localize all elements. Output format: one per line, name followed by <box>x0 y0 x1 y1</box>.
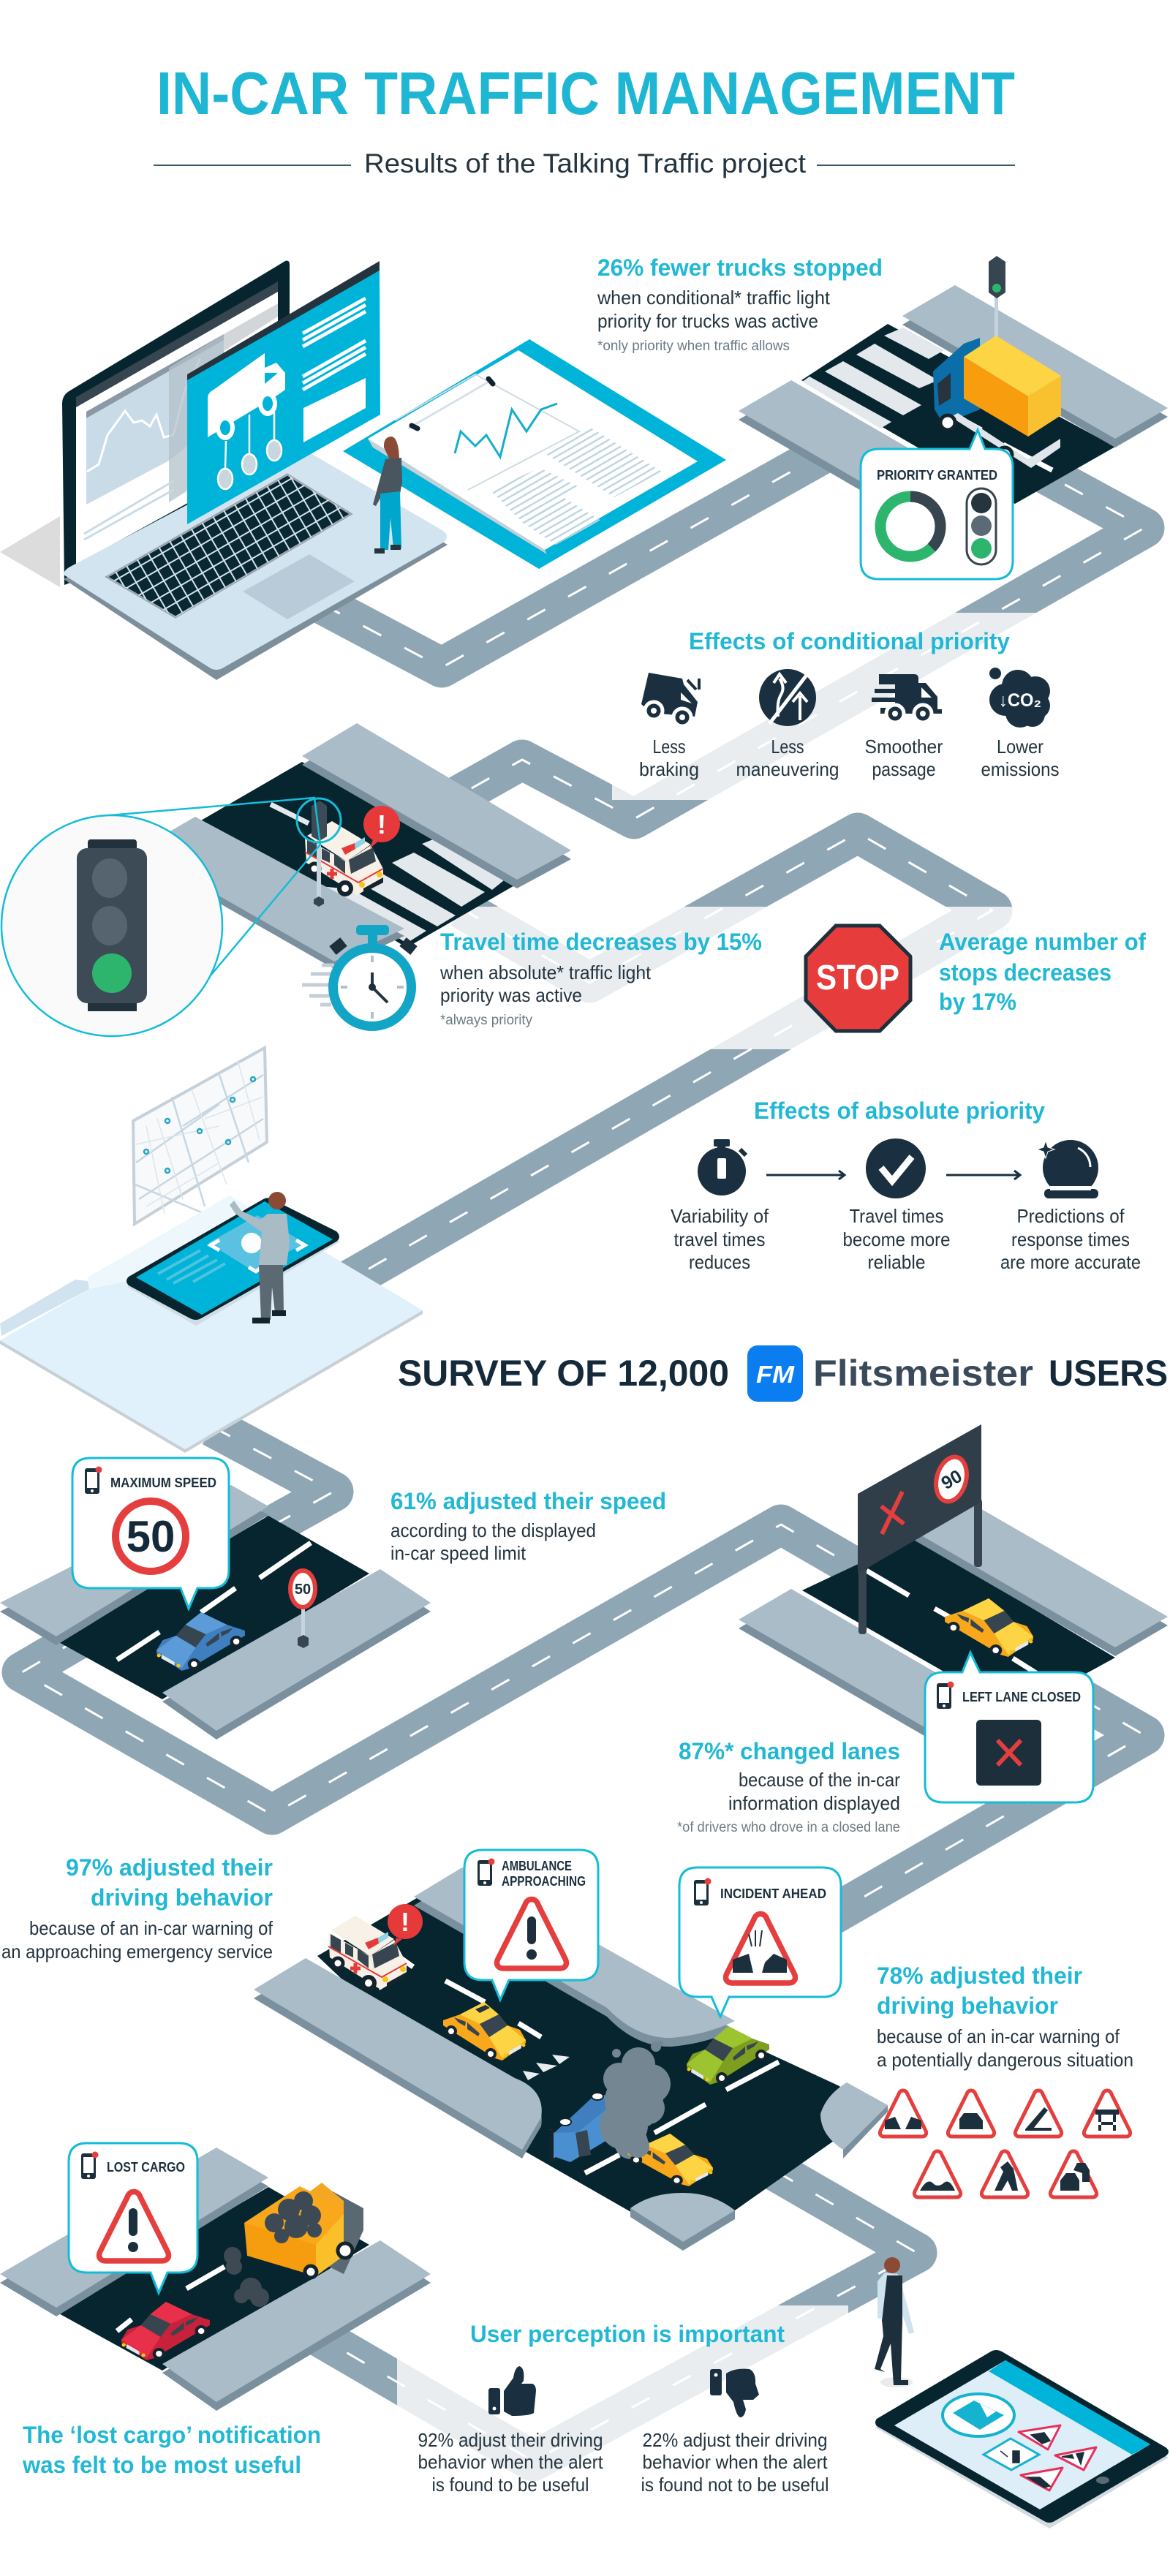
labels: absolute priority effects: travel times <box>674 1228 765 1250</box>
icon: stop sign: STOP <box>816 959 899 997</box>
platform: yellow car road <box>739 1494 1168 1747</box>
text: travel time decreases: *always priority <box>440 1013 532 1028</box>
laptop screen <box>62 261 290 585</box>
tablet <box>875 2350 1169 2528</box>
callout: ambulance approaching: AMBULANCE <box>502 1859 572 1873</box>
car: overturned blue <box>550 2093 614 2162</box>
platform: ambulance crossing <box>138 723 571 969</box>
platform: truck crossing <box>739 285 1168 538</box>
text: 61% adjusted speed <box>390 1488 666 1564</box>
labels: absolute priority effects: Predictions of <box>1016 1205 1125 1227</box>
truck <box>933 336 1061 468</box>
labels: conditional priority effects: braking <box>639 758 699 780</box>
labels: absolute priority effects: response times <box>1011 1228 1130 1250</box>
sign gantry: 90 <box>937 1466 966 1494</box>
text: lost cargo most useful: The ‘lost cargo’ notification <box>23 2422 321 2448</box>
logo: Flitsmeister <box>747 1345 1033 1402</box>
text: 97% adjusted: 97% adjusted their <box>66 1854 273 1881</box>
text: travel time decreases: Travel time decreases by 15% <box>440 929 762 955</box>
labels: absolute priority effects: become more <box>842 1228 951 1250</box>
tablet: vehicle icon <box>943 2394 1014 2436</box>
dump truck with coal <box>224 2183 363 2307</box>
text: 26% fewer trucks stopped: when conditional* traffic light <box>597 287 831 309</box>
car: taxi <box>443 2002 526 2061</box>
ambulance with alert 2 <box>328 1904 423 1990</box>
callout: left lane closed <box>925 1653 1093 1802</box>
labels: conditional priority effects: maneuvering <box>736 758 839 780</box>
labels: absolute priority effects: are more accurate <box>1000 1251 1141 1273</box>
car: blue <box>156 1612 245 1671</box>
text: 92% adjust: behavior when the alert <box>418 2451 603 2473</box>
text: 97% adjusted: an approaching emergency service <box>1 1941 273 1963</box>
platform: phone <box>0 1196 423 1453</box>
icon: less maneuvering <box>759 669 816 726</box>
text: 61% adjusted speed: according to the displayed <box>390 1519 596 1541</box>
callout: ambulance approaching <box>464 1850 598 2000</box>
ambulance with alert 2: ! <box>401 1907 410 1937</box>
platform: lost cargo road <box>0 2148 431 2411</box>
text: 61% adjusted speed: 61% adjusted their speed <box>390 1488 666 1514</box>
map tile <box>133 1048 267 1224</box>
labels: conditional priority effects: emissions <box>981 758 1059 780</box>
icon: check <box>866 1138 926 1198</box>
labels: conditional priority effects: Less <box>652 736 686 758</box>
smoke overlap <box>626 2134 649 2158</box>
callout: maximum speed <box>72 1458 229 1609</box>
text: 26% fewer trucks stopped <box>597 254 883 354</box>
icon: dark stopwatch <box>698 1139 746 1196</box>
text: travel time decreases: priority was active <box>440 984 582 1006</box>
labels: conditional priority effects: Smoother <box>864 736 943 758</box>
figure: woman <box>373 437 402 554</box>
smoke <box>600 2041 671 2159</box>
platform: crossroads <box>254 1867 888 2251</box>
text: 61% adjusted speed: in-car speed limit <box>390 1542 526 1564</box>
text: travel time decreases: when absolute* traffic light <box>439 962 652 983</box>
text: 92% adjust: 92% adjust their driving <box>418 2429 603 2451</box>
tablet: alert signs <box>984 2425 1096 2490</box>
labels: absolute priority effects: reliable <box>867 1251 926 1273</box>
text: 87% changed lanes: 87%* changed lanes <box>679 1738 900 1764</box>
car: yellow <box>945 1598 1033 1657</box>
text: 22% adjust: 22% adjust their driving <box>642 2429 828 2451</box>
ambulance with alert <box>305 806 400 896</box>
arrow <box>766 1171 845 1179</box>
icon: thumbs up <box>488 2366 536 2416</box>
arrow <box>946 1171 1020 1179</box>
street light pole <box>312 801 327 907</box>
panel: clipboard report <box>343 339 726 569</box>
callout: maximum speed: 50 <box>127 1512 175 1561</box>
text: 78% adjusted: 78% adjusted their <box>877 1963 1082 1989</box>
heading: survey: SURVEY OF 12,000 <box>398 1353 729 1394</box>
callout: left lane closed: LEFT LANE CLOSED <box>962 1690 1081 1704</box>
sign: speed 50 on pole <box>290 1571 315 1648</box>
text: 22% adjust <box>641 2429 829 2496</box>
text: 78% adjusted <box>877 1963 1133 2071</box>
icon: stop sign <box>806 926 910 1031</box>
heading: effects of conditional priority: Effects of conditional priority <box>689 628 1010 654</box>
sign gantry <box>858 1424 982 1634</box>
car: red <box>121 2302 210 2360</box>
text: 92% adjust: is found to be useful <box>431 2474 589 2496</box>
callout: lost cargo <box>69 2143 197 2293</box>
icon: thumbs down <box>710 2369 759 2417</box>
logo: Flitsmeister: FM <box>756 1361 796 1388</box>
text: 22% adjust: behavior when the alert <box>642 2451 828 2473</box>
icon: stopwatch <box>302 925 414 1027</box>
road network <box>22 452 1144 2496</box>
labels: absolute priority effects <box>671 1205 1141 1273</box>
text: 78% adjusted: a potentially dangerous situation <box>877 2049 1133 2071</box>
icon: lower emissions <box>989 668 1050 728</box>
icon: less braking <box>641 673 699 726</box>
labels: conditional priority effects: passage <box>872 758 936 780</box>
text: average stops: by 17% <box>939 989 1016 1015</box>
text: 87% changed lanes: information displayed <box>728 1792 900 1814</box>
text: average stops <box>939 929 1146 1015</box>
labels: absolute priority effects: reduces <box>689 1251 750 1273</box>
figure: man with phone <box>875 2257 914 2387</box>
text: 26% fewer trucks stopped: priority for trucks was active <box>597 310 818 332</box>
text: 97% adjusted: because of an in-car warning of <box>29 1917 273 1939</box>
labels: conditional priority effects: Less <box>771 736 804 758</box>
labels: conditional priority effects: Lower <box>997 736 1043 758</box>
text: 78% adjusted: because of an in-car warning of <box>877 2025 1120 2047</box>
icon: smoother passage <box>872 674 942 722</box>
text: 87% changed lanes <box>677 1738 900 1835</box>
text: 26% fewer trucks stopped: *only priority when traffic allows <box>597 339 790 354</box>
logo: Flitsmeister: Flitsmeister <box>813 1353 1033 1394</box>
text: 92% adjust <box>418 2429 603 2496</box>
platform: blue car road <box>0 1485 431 1740</box>
laptop base <box>64 446 448 680</box>
heading: effects of absolute priority: Effects of absolute priority <box>754 1098 1045 1124</box>
heading: user perception: User perception is important <box>470 2321 785 2347</box>
callout: lost cargo: LOST CARGO <box>107 2160 185 2175</box>
text: travel time decreases <box>439 929 762 1028</box>
callout: maximum speed: MAXIMUM SPEED <box>110 1476 216 1490</box>
icon: crystal ball <box>1037 1140 1098 1198</box>
car: green <box>687 2026 769 2085</box>
magnifier lens: traffic light <box>1 798 341 1036</box>
warning signs grid <box>880 2090 1131 2197</box>
callout: priority granted <box>861 430 1013 579</box>
text: 97% adjusted: driving behavior <box>91 1884 273 1911</box>
traffic light: truck crossing <box>989 256 1005 338</box>
text: 26% fewer trucks stopped: 26% fewer trucks stopped <box>597 254 883 281</box>
blue info panel <box>187 261 380 524</box>
labels: conditional priority effects <box>639 736 1059 780</box>
text: 87% changed lanes: *of drivers who drove in a closed lane <box>677 1820 900 1835</box>
phone with app <box>127 1198 340 1326</box>
sign: speed 50 on pole: 50 <box>295 1582 311 1598</box>
figure: man at phone <box>230 1192 290 1323</box>
icon: lower emissions: ↓CO₂ <box>999 690 1041 711</box>
text: average stops: Average number of <box>939 929 1146 955</box>
labels: absolute priority effects: Variability of <box>671 1205 769 1227</box>
heading: survey <box>398 1345 1168 1402</box>
panel: laptop illustration <box>0 261 448 680</box>
traffic light icon <box>967 488 996 564</box>
text: 22% adjust: is found not to be useful <box>641 2474 829 2496</box>
text: lost cargo most useful: was felt to be most useful <box>22 2452 301 2478</box>
text: lost cargo most useful <box>22 2422 321 2478</box>
callout: priority granted: PRIORITY GRANTED <box>877 468 997 483</box>
labels: absolute priority effects: Travel times <box>850 1205 943 1227</box>
subtitle: Results of the Talking Traffic project <box>364 148 807 178</box>
callout: incident ahead: INCIDENT AHEAD <box>720 1886 826 1901</box>
callout: incident ahead <box>679 1867 841 2017</box>
text: average stops: stops decreases <box>939 959 1112 986</box>
text: 78% adjusted: driving behavior <box>877 1993 1058 2019</box>
donut chart <box>880 496 940 556</box>
callout: ambulance approaching: APPROACHING <box>502 1874 586 1889</box>
ambulance with alert: ! <box>377 809 386 839</box>
text: 97% adjusted <box>1 1854 273 1963</box>
title: IN-CAR TRAFFIC MANAGEMENT <box>156 59 1015 127</box>
text: 87% changed lanes: because of the in-car <box>739 1769 900 1791</box>
car: yellow crash <box>628 2134 713 2186</box>
